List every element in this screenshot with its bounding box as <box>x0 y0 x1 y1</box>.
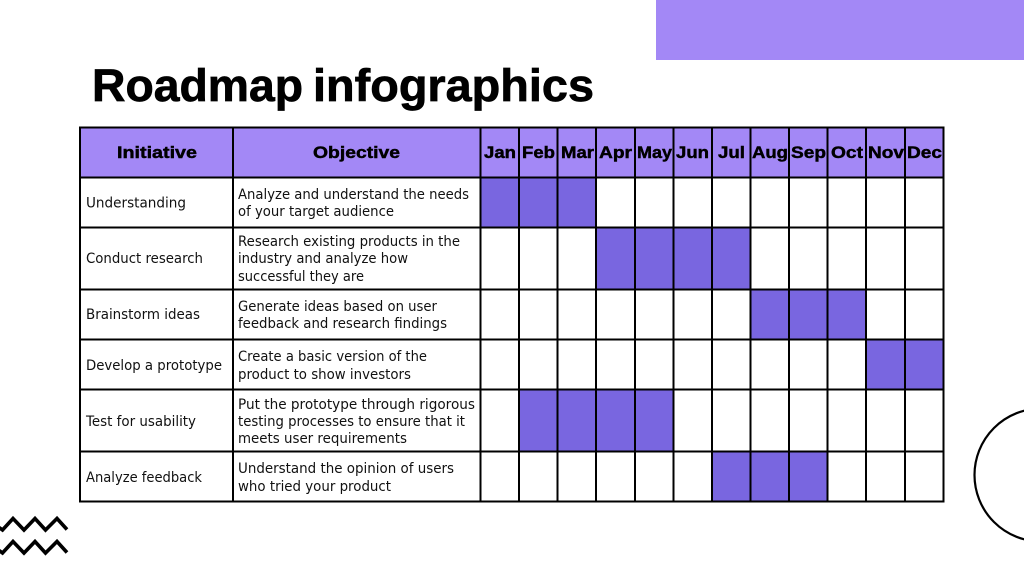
objective descriptions: successful they are <box>238 269 364 285</box>
bar: Analyze feedback Jul to Sep <box>712 452 828 502</box>
bar: Brainstorm ideas Aug to Oct <box>750 290 866 340</box>
decorative zigzag lines bottom left <box>0 518 67 553</box>
bar: Understanding Jan to Mar <box>480 178 596 228</box>
objective descriptions: industry and analyze how <box>238 251 408 267</box>
objective descriptions: Analyze and understand the needs <box>238 187 469 203</box>
objective descriptions: Generate ideas based on user <box>238 299 437 315</box>
header labels: Apr <box>599 144 633 162</box>
objective descriptions: Put the prototype through rigorous <box>238 397 475 413</box>
objective descriptions: meets user requirements <box>238 431 407 447</box>
header labels: Nov <box>868 144 905 162</box>
header labels <box>117 144 942 162</box>
decorative circle outline right <box>974 408 1024 542</box>
title: infographics <box>313 60 594 111</box>
objective descriptions: product to show investors <box>238 367 411 383</box>
header labels: Initiative <box>117 144 197 162</box>
objective descriptions: Create a basic version of the <box>238 349 427 365</box>
initiative labels <box>85 196 222 486</box>
header labels: Jul <box>718 144 745 162</box>
title: Roadmap <box>92 60 303 111</box>
initiative labels: Brainstorm ideas <box>86 307 200 323</box>
bar: Develop a prototype Nov to Dec <box>866 340 944 390</box>
table header background <box>80 128 944 178</box>
initiative labels: Test for usability <box>85 414 196 430</box>
bar: Test for usability Feb to May <box>519 390 674 452</box>
initiative labels: Develop a prototype <box>86 358 222 374</box>
gantt bars <box>480 178 944 502</box>
initiative labels: Understanding <box>86 196 186 212</box>
bar: Conduct research Apr to Jul <box>596 228 750 290</box>
objective descriptions: Research existing products in the <box>238 234 460 250</box>
header labels: Objective <box>313 144 400 162</box>
header labels: Mar <box>561 144 595 162</box>
objective descriptions: testing processes to ensure that it <box>238 414 465 430</box>
header labels: May <box>637 144 673 162</box>
header labels: Sep <box>791 144 826 162</box>
header labels: Oct <box>831 144 864 162</box>
objective descriptions: Understand the opinion of users <box>238 461 454 477</box>
header labels: Jan <box>484 144 516 162</box>
header labels: Aug <box>752 144 788 162</box>
header labels: Dec <box>907 144 942 162</box>
header labels: Jun <box>676 144 709 162</box>
objective descriptions <box>238 187 475 495</box>
objective descriptions: of your target audience <box>238 204 394 220</box>
roadmap table <box>80 126 944 502</box>
decorative purple banner top right <box>656 0 1024 60</box>
objective descriptions: feedback and research findings <box>238 316 447 332</box>
initiative labels: Conduct research <box>86 251 203 267</box>
header labels: Feb <box>522 144 555 162</box>
initiative labels: Analyze feedback <box>86 470 203 486</box>
objective descriptions: who tried your product <box>238 479 391 495</box>
